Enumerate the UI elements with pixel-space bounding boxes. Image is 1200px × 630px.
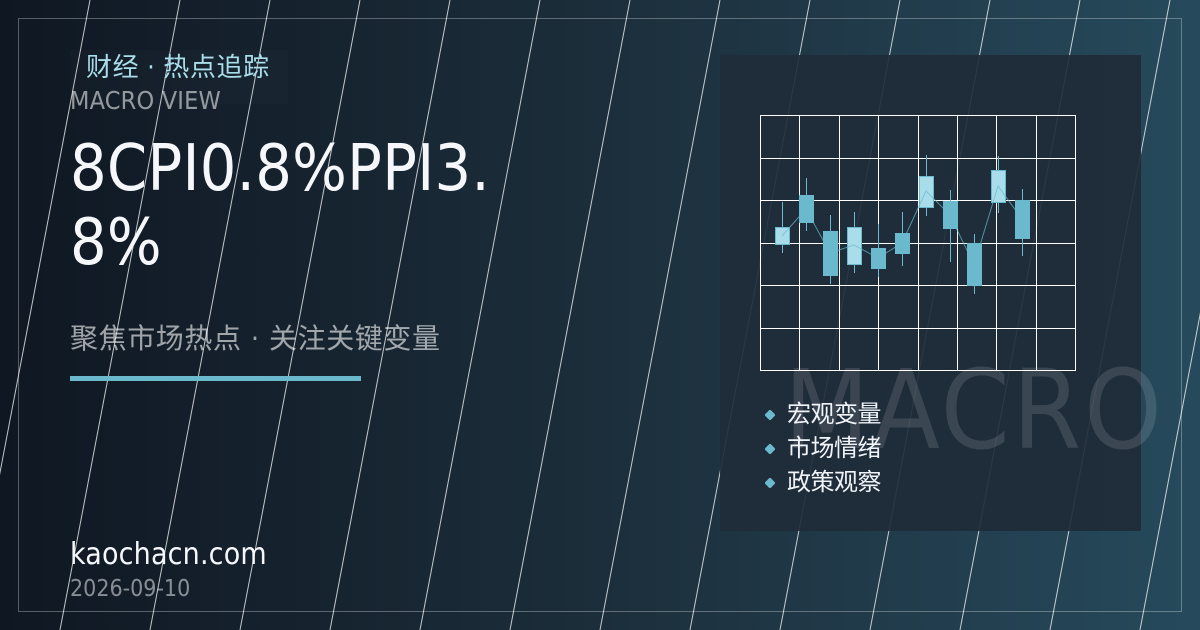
- bullet 3: [764, 477, 776, 489]
- accent bar: [70, 376, 361, 381]
- watermark: MACRO: [784, 346, 1165, 474]
- subtitle: 聚焦市场热点 · 关注关键变量: [70, 322, 441, 355]
- bullet 1: [764, 409, 776, 421]
- item 3: 政策观察: [787, 468, 881, 496]
- bullet list: [764, 400, 881, 496]
- site name: kaochacn.com: [70, 537, 267, 572]
- eyebrow: macro view: MACRO VIEW: [70, 86, 221, 115]
- title: 8CPI0.8%PPI3.8%: [70, 132, 490, 280]
- panel: chart card: [720, 55, 1141, 531]
- tag: category label: [70, 50, 288, 104]
- item 1: 宏观变量: [787, 400, 881, 428]
- item 2: 市场情绪: [787, 434, 881, 462]
- tag: category label: 财经 · 热点追踪: [86, 53, 270, 83]
- bullet 2: [764, 443, 776, 455]
- date: 2026-09-10: [70, 576, 190, 602]
